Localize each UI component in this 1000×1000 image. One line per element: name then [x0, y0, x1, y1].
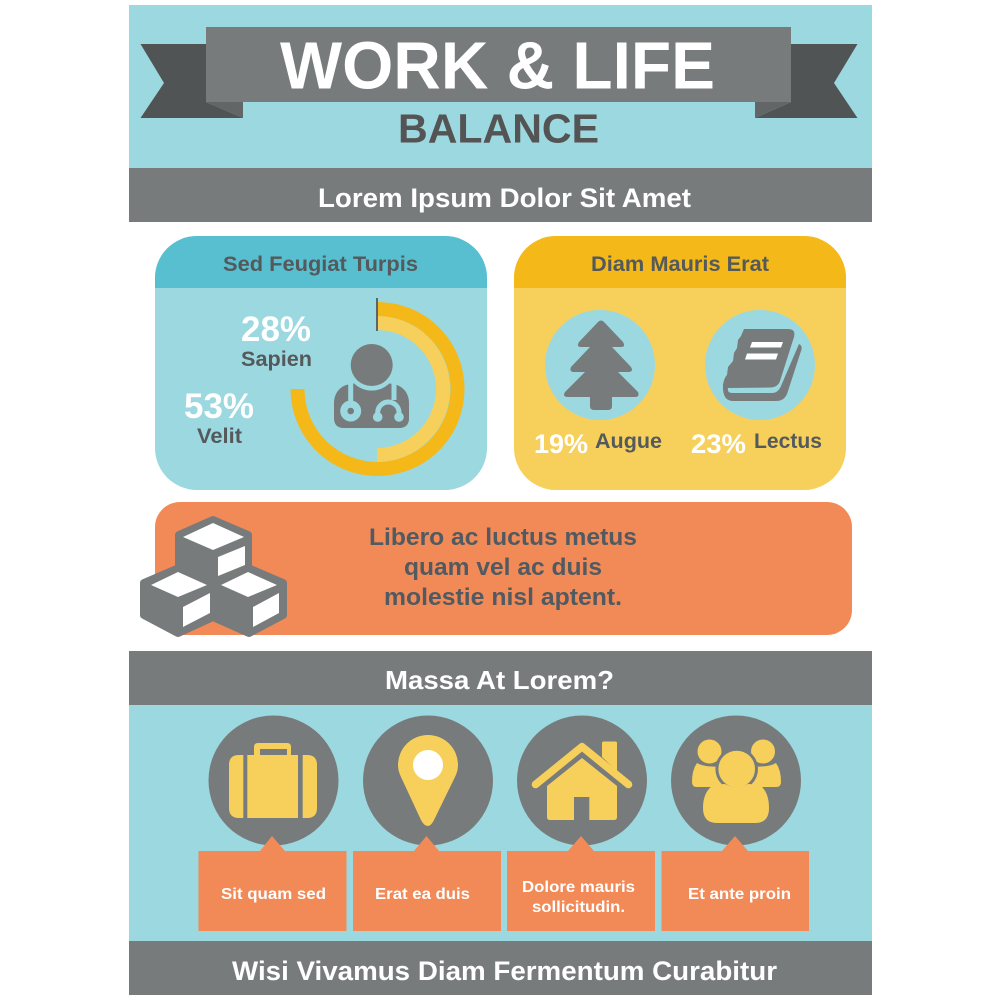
section heading band: [129, 651, 872, 705]
callout text: [369, 524, 637, 611]
panel: diam mauris erat: [514, 236, 846, 490]
callout text: Libero ac luctus metus: [369, 524, 637, 551]
section heading band: Massa At Lorem?: [385, 665, 614, 695]
item: map pin: [353, 716, 501, 931]
item: house: Dolore mauris: [522, 879, 635, 896]
stat: 19% augue: 19%: [534, 429, 588, 459]
stat: 23% lectus: 23%: [691, 429, 746, 459]
stat: 19% augue: [534, 429, 662, 459]
donut chart: [298, 298, 458, 469]
subtitle band: [129, 168, 872, 222]
panel heading: Diam Mauris Erat: [591, 253, 769, 276]
callout text: molestie nisl aptent.: [384, 584, 622, 611]
icon: doctor: [334, 344, 409, 428]
stat: 23% lectus: Lectus: [754, 430, 822, 453]
section panel: [129, 705, 872, 941]
panel heading: Sed Feugiat Turpis: [223, 253, 418, 276]
item: house: [507, 716, 655, 931]
stat: 28% sapien: 28%: [241, 310, 311, 349]
icon: cubes: [144, 520, 283, 633]
item: people: Et ante proin: [688, 886, 791, 903]
icon: tree: [545, 310, 655, 420]
subtitle band: Lorem Ipsum Dolor Sit Amet: [318, 183, 691, 213]
stat: 53% velit: [184, 387, 254, 448]
stat: 28% sapien: [241, 310, 312, 371]
title: WORK & LIFE: [280, 28, 715, 104]
item: people: [662, 716, 809, 931]
header panel: [129, 5, 872, 168]
item: map pin: Erat ea duis: [375, 886, 470, 903]
stat: 53% velit: Velit: [197, 425, 242, 448]
item: briefcase: Sit quam sed: [221, 886, 326, 903]
stat: 19% augue: Augue: [595, 430, 662, 453]
panel: sed feugiat turpis: [155, 236, 487, 490]
callout panel: [144, 502, 852, 635]
stat: 53% velit: 53%: [184, 387, 254, 426]
item: briefcase: [198, 716, 346, 931]
footer band: [129, 941, 872, 995]
icon: book: [705, 310, 815, 420]
stat: 23% lectus: [691, 429, 822, 459]
footer band: Wisi Vivamus Diam Fermentum Curabitur: [232, 956, 778, 986]
subtitle: BALANCE: [398, 106, 599, 152]
stat: 28% sapien: Sapien: [241, 348, 312, 371]
item: house: sollicitudin.: [532, 899, 625, 916]
callout text: quam vel ac duis: [404, 554, 602, 581]
ribbon banner: [140, 27, 858, 118]
